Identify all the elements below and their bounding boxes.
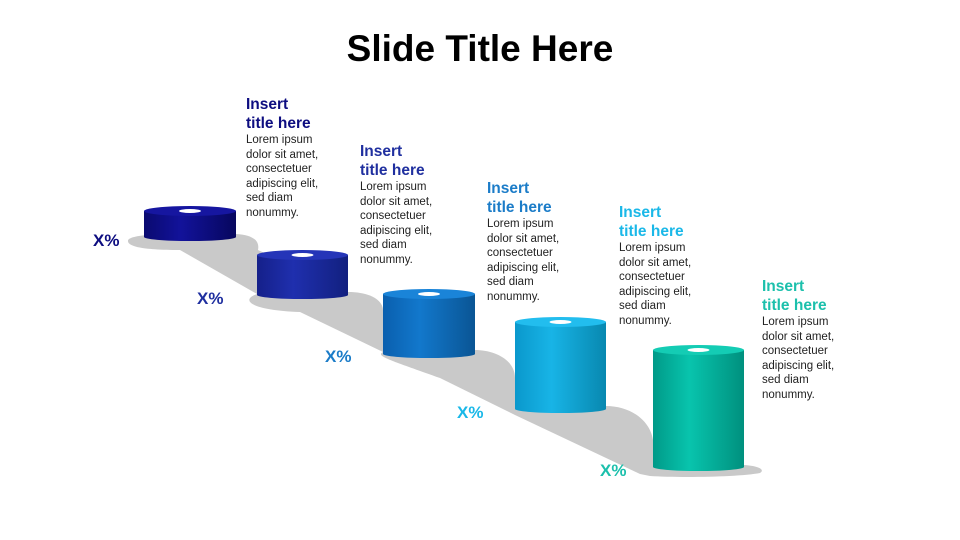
percent labels: X% (325, 347, 351, 366)
text block 4: adipiscing elit, (619, 286, 691, 298)
cylinder 4 (515, 317, 606, 413)
text block 3: title here (487, 199, 552, 216)
text block 1: nonummy. (246, 207, 299, 219)
cylinder 5 (653, 345, 744, 471)
text block 3: adipiscing elit, (487, 262, 559, 274)
shadow band (128, 234, 762, 477)
text block 3 (487, 180, 559, 303)
text block 4: title here (619, 223, 684, 240)
text block 2: Lorem ipsum (360, 181, 426, 193)
text block 1: Insert (246, 96, 288, 113)
text block 3: sed diam (487, 276, 534, 288)
text block 2: consectetuer (360, 210, 426, 222)
text block 5 (762, 278, 834, 401)
text block 3: Lorem ipsum (487, 218, 553, 230)
text block 5: adipiscing elit, (762, 360, 834, 372)
text block 4: Lorem ipsum (619, 242, 685, 254)
text block 4: Insert (619, 204, 661, 221)
text block 1: Lorem ipsum (246, 134, 312, 146)
text block 4: consectetuer (619, 271, 685, 283)
text block 1: title here (246, 115, 311, 132)
percent labels: X% (457, 403, 483, 422)
cylinder 3 (383, 289, 475, 358)
text block 5: consectetuer (762, 345, 828, 357)
text block 5: dolor sit amet, (762, 331, 834, 343)
percent labels: X% (93, 231, 119, 250)
text block 2: nonummy. (360, 254, 413, 266)
text block 4: dolor sit amet, (619, 257, 691, 269)
cylinder 1 (144, 206, 236, 241)
text block 2: adipiscing elit, (360, 225, 432, 237)
text block 3: Insert (487, 180, 529, 197)
text block 1: consectetuer (246, 163, 312, 175)
percent labels (93, 231, 626, 480)
text block 3: consectetuer (487, 247, 553, 259)
text block 1: dolor sit amet, (246, 149, 318, 161)
text block 2 (360, 143, 432, 266)
text block 2: title here (360, 162, 425, 179)
text block 5: nonummy. (762, 389, 815, 401)
percent labels: X% (197, 289, 223, 308)
text block 3: nonummy. (487, 291, 540, 303)
text block 3: dolor sit amet, (487, 233, 559, 245)
percent labels: X% (600, 461, 626, 480)
text block 2: sed diam (360, 239, 407, 251)
text block 5: sed diam (762, 374, 809, 386)
text block 4: nonummy. (619, 315, 672, 327)
cylinder 2 (257, 250, 348, 299)
text block 2: Insert (360, 143, 402, 160)
text block 5: Lorem ipsum (762, 316, 828, 328)
title: Slide Title Here (347, 28, 613, 69)
text block 4 (619, 204, 691, 327)
text block 5: Insert (762, 278, 804, 295)
text block 1: sed diam (246, 192, 293, 204)
text block 4: sed diam (619, 300, 666, 312)
text block 5: title here (762, 297, 827, 314)
text block 1 (246, 96, 318, 219)
text block 2: dolor sit amet, (360, 196, 432, 208)
text block 1: adipiscing elit, (246, 178, 318, 190)
